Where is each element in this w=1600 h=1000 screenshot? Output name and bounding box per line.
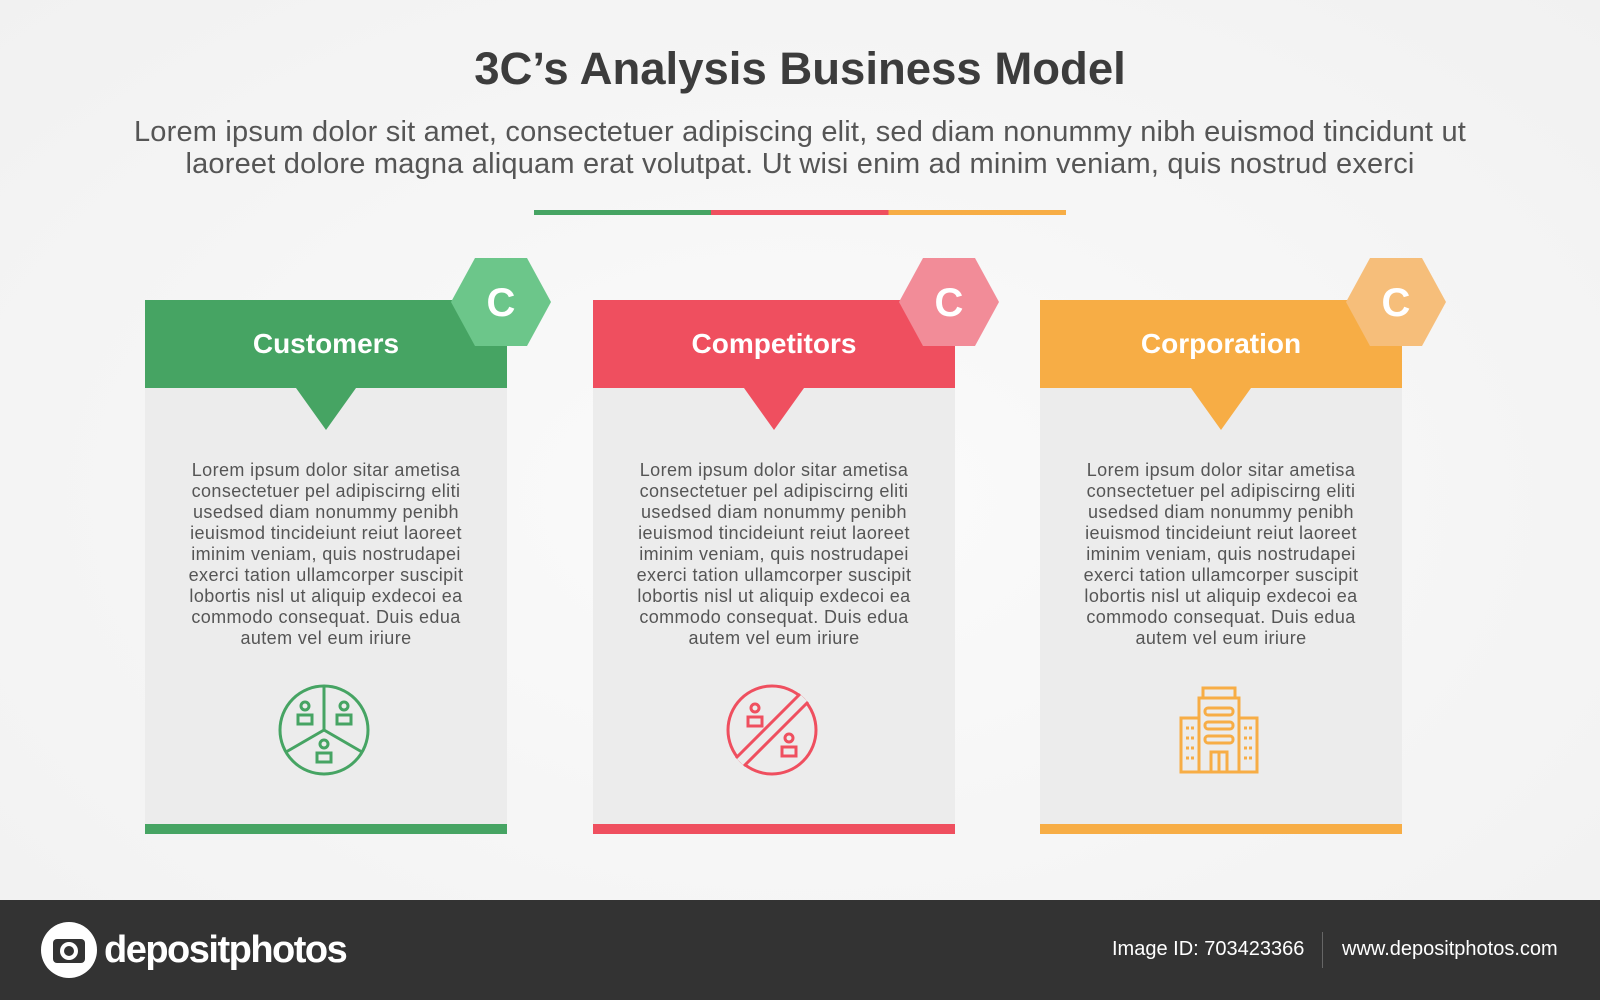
footer logo: depositphotos	[104, 928, 346, 970]
text block: usedsed diam nonummy penibh	[641, 502, 907, 522]
text block: lobortis nisl ut aliquip exdecoi ea	[1084, 586, 1358, 606]
text block: ieuismod tincideiunt reiut laoreet	[190, 523, 462, 543]
divider line	[534, 210, 1066, 215]
footer url: www.depositphotos.com	[1342, 938, 1558, 960]
subtitle: Lorem ipsum dolor sit amet, consectetuer adipiscing elit, sed diam nonummy nibh euismod tincidunt ut	[134, 116, 1466, 148]
text block: lobortis nisl ut aliquip exdecoi ea	[189, 586, 463, 606]
text block: iminim veniam, quis nostrudapei	[1086, 544, 1356, 564]
text block: iminim veniam, quis nostrudapei	[639, 544, 909, 564]
panel: corporation	[1040, 258, 1446, 834]
text block: commodo consequat. Duis edua	[191, 607, 461, 627]
header: customers: Customers	[253, 328, 399, 359]
text block: consectetuer pel adipiscirng eliti	[1087, 481, 1355, 501]
icon: competitors	[726, 684, 818, 776]
hexagon badge	[1346, 258, 1446, 346]
hexagon badge	[899, 258, 999, 346]
subtitle	[134, 116, 1466, 180]
text block	[1084, 460, 1358, 648]
hexagon badge: C	[1382, 281, 1410, 325]
text block: consectetuer pel adipiscirng eliti	[640, 481, 908, 501]
hexagon badge: C	[487, 281, 515, 325]
header: corporation	[1040, 300, 1402, 388]
panel: customers	[145, 258, 551, 834]
text block: consectetuer pel adipiscirng eliti	[192, 481, 460, 501]
text block: Lorem ipsum dolor sitar ametisa	[192, 460, 460, 480]
text block: iminim veniam, quis nostrudapei	[191, 544, 461, 564]
text block: autem vel eum iriure	[688, 628, 860, 648]
text block: usedsed diam nonummy penibh	[193, 502, 459, 522]
text block: ieuismod tincideiunt reiut laoreet	[638, 523, 910, 543]
bottom bar	[145, 824, 507, 834]
title: 3C’s Analysis Business Model	[474, 43, 1126, 94]
text block: autem vel eum iriure	[1135, 628, 1307, 648]
hexagon badge	[451, 258, 551, 346]
icon: building	[1180, 686, 1258, 774]
header: corporation: Corporation	[1141, 328, 1301, 359]
footer image id: Image ID: 703423366	[1112, 938, 1304, 960]
subtitle: laoreet dolore magna aliquam erat volutpat. Ut wisi enim ad minim veniam, quis nostrud exerci	[185, 148, 1415, 180]
hexagon badge: C	[935, 281, 963, 325]
text block	[637, 460, 911, 648]
text block: commodo consequat. Duis edua	[639, 607, 909, 627]
text block: exerci tation ullamcorper suscipit	[637, 565, 911, 585]
panel: competitors	[593, 258, 999, 834]
footer logo	[41, 922, 346, 978]
text block: Lorem ipsum dolor sitar ametisa	[1087, 460, 1355, 480]
bottom bar	[1040, 824, 1402, 834]
text block: commodo consequat. Duis edua	[1086, 607, 1356, 627]
text block: exerci tation ullamcorper suscipit	[1084, 565, 1358, 585]
text block	[189, 460, 463, 648]
header: competitors: Competitors	[692, 328, 856, 359]
text block: exerci tation ullamcorper suscipit	[189, 565, 463, 585]
text block: Lorem ipsum dolor sitar ametisa	[640, 460, 908, 480]
icon: customer segments	[278, 684, 370, 776]
text block: usedsed diam nonummy penibh	[1088, 502, 1354, 522]
footer	[0, 900, 1600, 1000]
header: competitors	[593, 300, 955, 388]
text block: ieuismod tincideiunt reiut laoreet	[1085, 523, 1357, 543]
bottom bar	[593, 824, 955, 834]
text block: autem vel eum iriure	[240, 628, 412, 648]
header: customers	[145, 300, 507, 388]
text block: lobortis nisl ut aliquip exdecoi ea	[637, 586, 911, 606]
